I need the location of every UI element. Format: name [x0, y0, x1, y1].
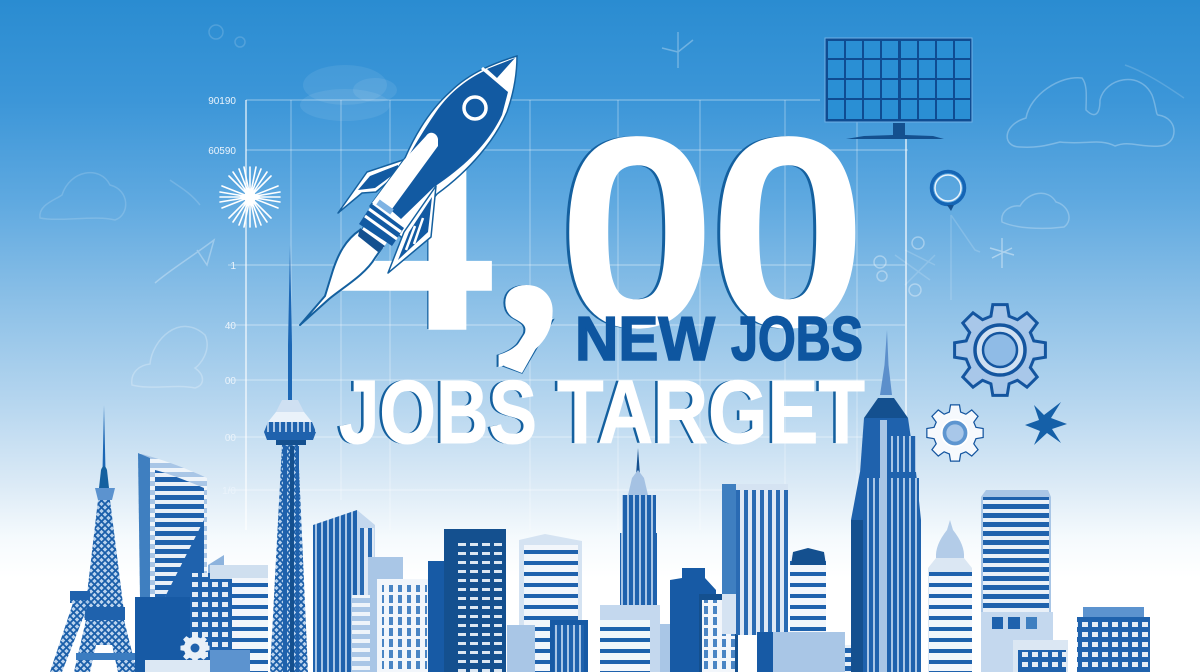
- Empire-style tower: [851, 330, 921, 672]
- chart axis labels: 90190: [208, 96, 236, 107]
- icon: small white gear: [927, 405, 983, 461]
- heading: JOBS TARGET: [336, 363, 865, 463]
- low light block: [757, 632, 865, 672]
- skyline: [50, 245, 1150, 672]
- nose cone: [487, 58, 515, 78]
- chart axis labels: 40: [225, 321, 236, 332]
- digits 00: [555, 80, 867, 384]
- chart axis labels: 1: [230, 261, 236, 272]
- capped striped tower: [790, 548, 826, 672]
- dark block: [135, 597, 198, 672]
- subheading: NEW JOBS: [575, 305, 863, 374]
- light low rise: [368, 557, 403, 672]
- big number 4,000 headline: [336, 77, 867, 388]
- side crane: [50, 591, 90, 672]
- hull: [370, 56, 517, 238]
- icon: sunburst: [220, 167, 280, 227]
- heading: JOBS TARGET: TARGET: [557, 363, 865, 463]
- dark grid block: [699, 594, 738, 672]
- heading: JOBS TARGET: JOBS: [339, 363, 537, 463]
- blocky tower: [981, 490, 1068, 672]
- stepped spire tower: [600, 448, 660, 672]
- digits 00: 0: [558, 80, 716, 384]
- subheading: NEW JOBS: JOBS: [731, 305, 863, 374]
- heading: JOBS TARGET: TARGET: [554, 363, 862, 463]
- subheading: NEW JOBS: NEW: [575, 305, 715, 374]
- dark stepped building: [670, 568, 716, 672]
- icon: rocket: [300, 56, 517, 325]
- chart axis labels: 00: [225, 376, 236, 387]
- domed tower: [928, 520, 972, 672]
- heading: JOBS TARGET: JOBS: [336, 363, 534, 463]
- chart axis labels: 00: [225, 433, 236, 444]
- white grid office: [377, 579, 430, 672]
- left fin: [338, 160, 404, 213]
- striped office: [519, 534, 582, 672]
- CN tower: [264, 245, 316, 672]
- panel stand: [846, 123, 944, 139]
- digit 4: 4: [338, 77, 494, 388]
- lower office building: [190, 555, 268, 672]
- faint cloud at top of chart: [300, 65, 397, 121]
- white stripe: [372, 133, 438, 209]
- dark grid tower: [428, 529, 506, 672]
- porthole: [464, 97, 486, 119]
- chart axis labels: 60590: [208, 146, 236, 157]
- digits 00: 0: [706, 80, 864, 384]
- tall office: [313, 510, 375, 672]
- icon: dark star: [1025, 402, 1067, 445]
- digit 4: 4: [336, 77, 492, 388]
- comma: ,: [495, 83, 563, 384]
- comma: ,: [493, 83, 561, 384]
- faint background clouds and doodles: [40, 25, 1184, 388]
- Eiffel tower: [50, 405, 137, 672]
- flame: [300, 230, 382, 325]
- icon: large gear: [955, 305, 1045, 395]
- chart grid: [228, 100, 908, 530]
- icon: solar panel monitor: [825, 38, 972, 139]
- curved tower: [138, 453, 207, 597]
- panel cells: [828, 41, 970, 119]
- icon: gear on building: [180, 633, 210, 663]
- digits 00: 0: [555, 80, 713, 384]
- chart axis labels: [208, 96, 236, 497]
- far right building: [1077, 607, 1150, 672]
- icon: location ring: [932, 172, 964, 211]
- tall vertical stripe tower: [722, 484, 788, 635]
- digits 00: 0: [709, 80, 867, 384]
- right fin: [388, 186, 436, 273]
- engine bands: [358, 202, 404, 252]
- chart axis labels: 1/0: [222, 486, 236, 497]
